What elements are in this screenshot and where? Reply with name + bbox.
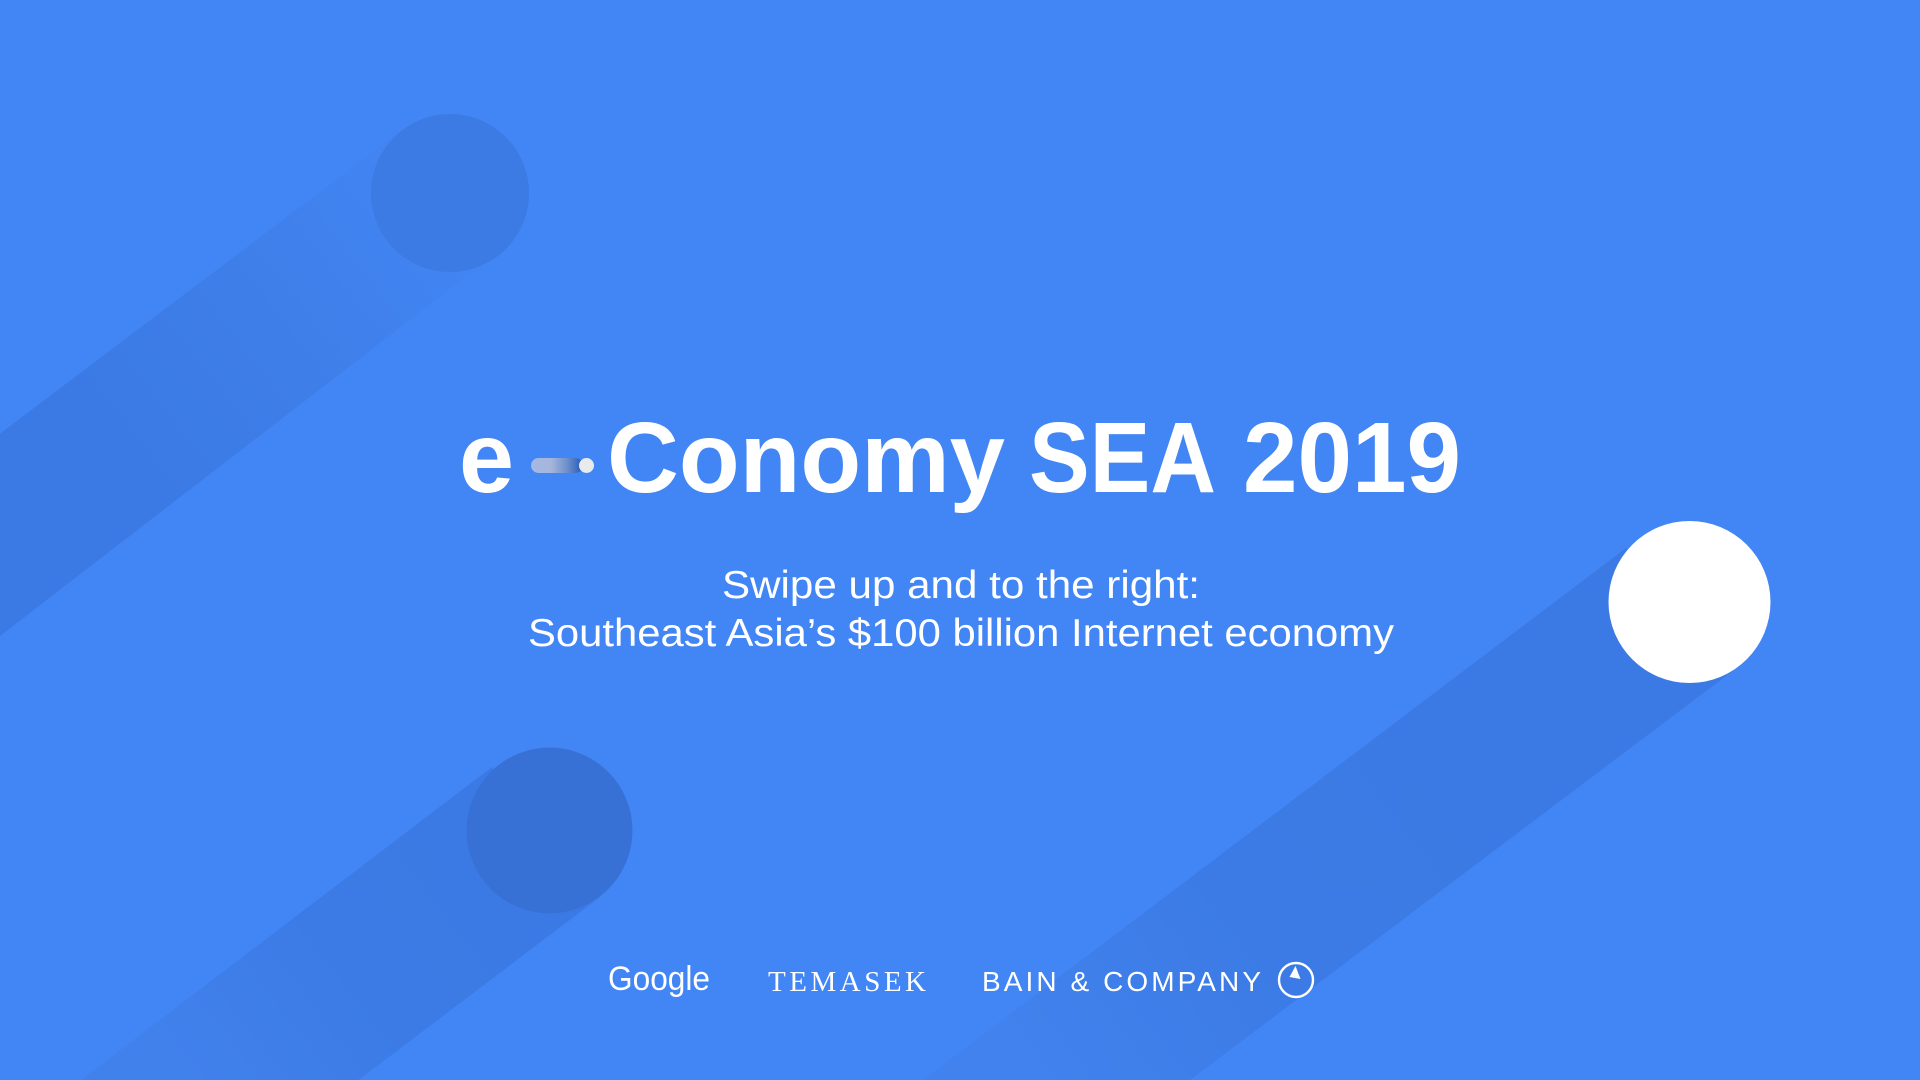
decorative ball with trail: bottom left xyxy=(81,748,632,1080)
logo: Bain & Company: BAIN & COMPANY xyxy=(982,966,1261,997)
title: 2019 xyxy=(1243,402,1461,514)
decorative ball with trail: top left xyxy=(0,114,529,636)
title: e xyxy=(459,402,514,514)
logo: Temasek: TEMASEK xyxy=(768,966,926,998)
subtitle: Southeast Asia’s $100 billion Internet economy xyxy=(528,612,1395,655)
subtitle: Swipe up and to the right: xyxy=(722,564,1200,607)
title: SEA xyxy=(1029,402,1216,514)
title: Conomy xyxy=(607,402,1005,514)
white ball with trail: right xyxy=(923,521,1770,1080)
icon: swoosh hyphen xyxy=(531,458,594,473)
title xyxy=(459,402,1461,514)
subtitle xyxy=(528,564,1395,655)
logo: Google: Google xyxy=(608,960,710,998)
icon: Bain compass xyxy=(1279,963,1313,997)
